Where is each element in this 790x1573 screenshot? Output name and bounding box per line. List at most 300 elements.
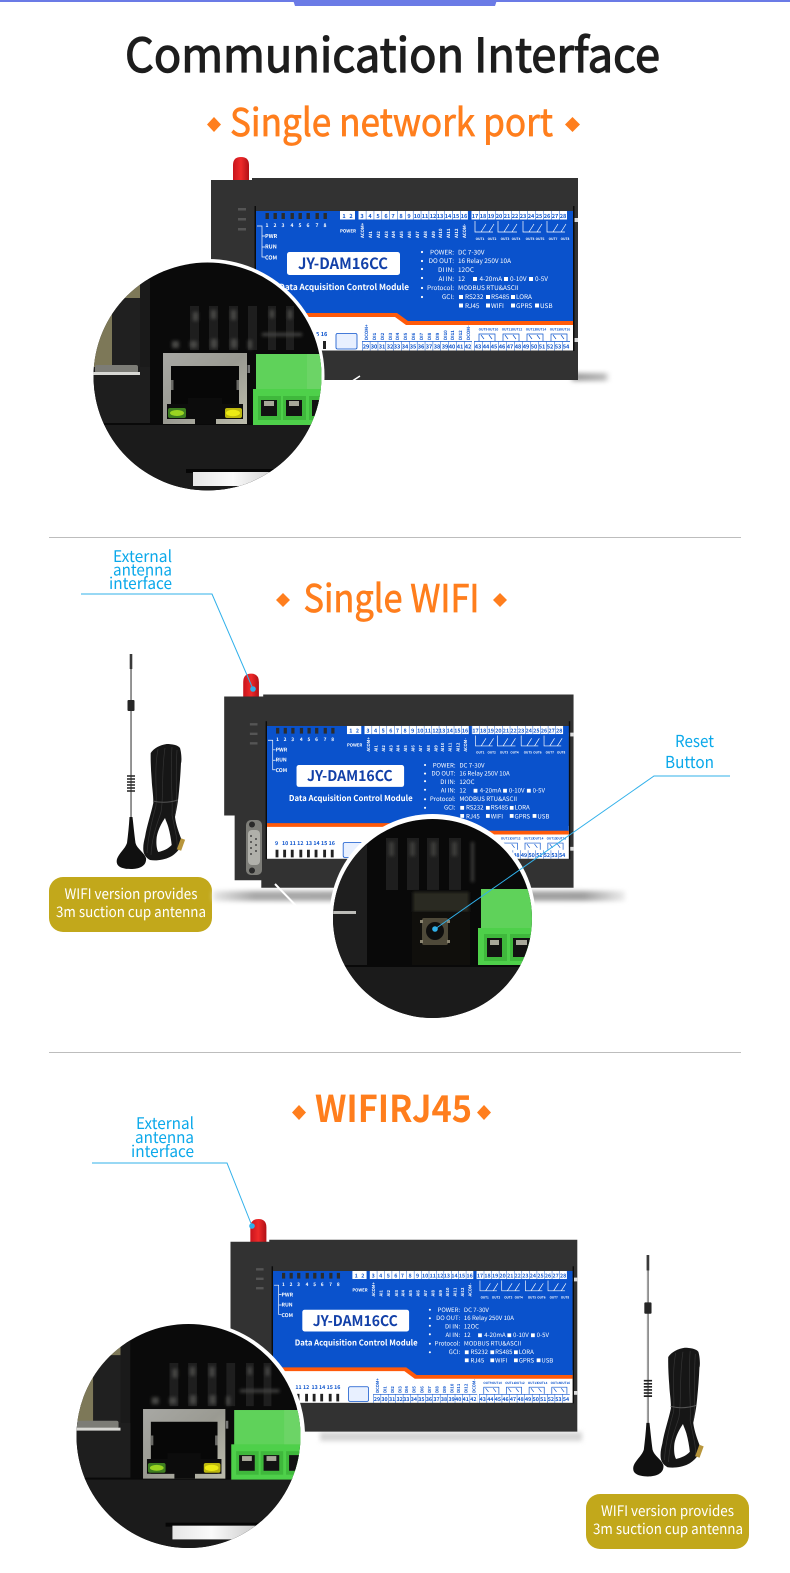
panel: blue device faceplate: 31 bbox=[389, 1395, 395, 1403]
panel: blue device faceplate: 14 bbox=[305, 330, 312, 338]
panel: blue device faceplate: ACOM+ bbox=[360, 222, 366, 239]
specification list: DI IN: bbox=[438, 265, 454, 274]
panel: blue device faceplate: Data Acquisition Control Module bbox=[289, 793, 413, 804]
panel: blue device faceplate: AI5 bbox=[403, 745, 409, 753]
panel: blue device faceplate: 7 bbox=[329, 1281, 332, 1288]
panel: blue device faceplate: POWER bbox=[352, 1288, 368, 1293]
panel: blue device faceplate: AI8 bbox=[426, 745, 432, 753]
panel: blue device faceplate: AI5 bbox=[399, 231, 405, 239]
panel: blue device faceplate: OUT14 bbox=[537, 1380, 547, 1385]
panel: blue device faceplate: DI12 bbox=[458, 330, 464, 340]
panel: blue device faceplate: 20 bbox=[500, 1272, 506, 1279]
icon: suction cup antenna bbox=[117, 654, 183, 869]
panel: blue device faceplate: OUT3 bbox=[501, 236, 509, 241]
panel: blue device faceplate: 39 bbox=[449, 1395, 455, 1403]
panel: blue device faceplate: POWER bbox=[347, 743, 362, 748]
panel: blue device faceplate: 6 bbox=[307, 222, 310, 229]
panel: blue device faceplate: OUT5 bbox=[524, 750, 532, 755]
specification list: WIFI bbox=[491, 301, 504, 310]
panel: blue device faceplate: 15 bbox=[454, 727, 461, 735]
specification list: USB bbox=[541, 1356, 553, 1365]
specification list: RS232 bbox=[465, 292, 484, 301]
panel: blue device faceplate: 35 bbox=[418, 1395, 425, 1403]
specification list: AI IN: bbox=[446, 1331, 460, 1339]
panel: blue device faceplate: 16 bbox=[321, 330, 328, 338]
panel: blue device faceplate: AI9 bbox=[438, 1290, 444, 1297]
specification list: DC 7-30V bbox=[458, 248, 485, 256]
leader line: external antenna interface (WIFI) bbox=[81, 594, 256, 692]
panel: blue device faceplate: 6 bbox=[384, 212, 388, 220]
specification list: USB bbox=[537, 812, 549, 820]
inset: RJ45 port close-up, WIFI+RJ45 model bbox=[76, 1324, 305, 1548]
model label: JY-DAM16CC bbox=[307, 765, 393, 786]
specification list: MODBUS RTU&ASCII bbox=[459, 795, 517, 803]
panel: blue device faceplate: 8 bbox=[324, 222, 327, 229]
panel: blue device faceplate: DI9 bbox=[435, 332, 441, 340]
panel: blue device faceplate: OUT7 bbox=[550, 1295, 558, 1299]
panel: blue device faceplate: 51 bbox=[539, 342, 545, 350]
panel: blue device faceplate: ACOM+ bbox=[366, 737, 372, 753]
panel: blue device faceplate: OUT11 bbox=[501, 836, 511, 841]
panel: blue device faceplate: DI11 bbox=[456, 1383, 462, 1393]
panel: blue device faceplate: AI7 bbox=[415, 231, 421, 239]
panel: blue device faceplate: 22 bbox=[512, 212, 519, 220]
panel: blue device faceplate: 44 bbox=[483, 342, 490, 350]
panel: blue device faceplate: OUT1 bbox=[476, 236, 484, 241]
panel: blue device faceplate: 2 bbox=[361, 1272, 365, 1279]
panel: blue device faceplate: OUT14 bbox=[533, 836, 543, 841]
inset: RJ45 network port close-up bbox=[94, 259, 360, 490]
panel: blue device faceplate: DI6 bbox=[411, 332, 417, 340]
specification list: MODBUS RTU&ASCII bbox=[464, 1339, 521, 1348]
panel: blue device faceplate: 19 bbox=[488, 727, 495, 735]
panel: blue device faceplate: 32 bbox=[387, 342, 394, 350]
panel: blue device faceplate: 4 bbox=[379, 1272, 383, 1279]
panel: blue device faceplate: 13 bbox=[297, 330, 303, 338]
panel: blue device faceplate: PWR bbox=[265, 232, 278, 240]
panel: blue device faceplate: 2 bbox=[349, 212, 353, 220]
panel: blue device faceplate: AI10 bbox=[440, 742, 446, 753]
specification list: Protocol: bbox=[435, 1339, 460, 1348]
panel: blue device faceplate: OUT9 bbox=[483, 1380, 492, 1385]
panel: blue device faceplate: ACOM- bbox=[462, 223, 468, 239]
panel: blue device faceplate: DI4 bbox=[395, 332, 401, 340]
panel: blue device faceplate: 10 bbox=[417, 727, 424, 735]
panel: blue device faceplate: 14 bbox=[451, 1272, 458, 1279]
specification list: DC 7-30V bbox=[459, 761, 485, 769]
panel: blue device faceplate: 3 bbox=[360, 212, 364, 220]
callout: external antenna interface (WIFI): External bbox=[113, 543, 172, 567]
specification list: RJ45 bbox=[465, 301, 480, 310]
callout: reset button: Reset bbox=[675, 728, 714, 752]
specification list: 0-5V bbox=[535, 274, 548, 283]
panel: blue device faceplate: AI10 bbox=[438, 228, 444, 239]
panel: blue device faceplate: OUT12 bbox=[512, 326, 522, 332]
panel: blue device faceplate: 13 bbox=[439, 727, 445, 735]
panel: blue device faceplate: 53 bbox=[555, 342, 561, 350]
panel: blue device faceplate: 47 bbox=[507, 342, 514, 350]
panel: blue device faceplate: 8 bbox=[337, 1281, 340, 1288]
panel: blue device faceplate: 3 bbox=[297, 1281, 300, 1288]
panel: blue device faceplate: OUT16 bbox=[560, 1380, 570, 1385]
panel: blue device faceplate: 33 bbox=[403, 1395, 409, 1403]
panel: blue device faceplate: OUT5 bbox=[526, 236, 534, 241]
specification list: USB bbox=[540, 301, 553, 310]
panel: blue device faceplate: OUT9 bbox=[479, 326, 487, 332]
panel: blue device faceplate: 19 bbox=[488, 212, 495, 220]
specification list: RJ45 bbox=[466, 812, 480, 820]
panel: blue device faceplate: AI3 bbox=[394, 1290, 400, 1297]
panel: blue device faceplate: 54 bbox=[559, 851, 566, 859]
badge: WIFI antenna note bbox=[49, 877, 212, 932]
panel: blue device faceplate: 24 bbox=[530, 1272, 537, 1279]
specification list: Protocol: bbox=[427, 283, 454, 292]
panel: blue device faceplate: DI1 bbox=[383, 1386, 388, 1393]
panel: blue device faceplate: 50 bbox=[531, 342, 538, 350]
panel: blue device faceplate: 17 bbox=[472, 727, 479, 735]
panel: blue device faceplate: 40 bbox=[455, 1395, 462, 1403]
panel: blue device faceplate: DI10 bbox=[443, 330, 449, 340]
panel: blue device faceplate: DI4 bbox=[404, 1386, 410, 1393]
panel: blue device faceplate: 43 bbox=[480, 1395, 486, 1403]
panel: blue device faceplate: AI12 bbox=[456, 742, 461, 753]
panel: blue device faceplate: DI7 bbox=[427, 1386, 433, 1393]
callout: external antenna interface (WIFI+RJ45): antenna bbox=[135, 1124, 194, 1148]
specification list: GCI: bbox=[444, 803, 456, 812]
panel: blue device faceplate: AI8 bbox=[423, 231, 429, 239]
panel: blue device faceplate: 1 bbox=[276, 736, 279, 743]
panel: blue device faceplate: 45 bbox=[491, 342, 497, 350]
panel: blue device faceplate: 26 bbox=[545, 1272, 552, 1279]
panel: blue device faceplate: 15 bbox=[313, 330, 319, 338]
top decorative bar bbox=[0, 0, 790, 6]
panel: blue device faceplate: 5 bbox=[299, 222, 302, 229]
panel: blue device faceplate: 49 bbox=[525, 1395, 532, 1403]
heading: single WIFI: Single WIFI bbox=[304, 568, 480, 623]
panel: blue device faceplate: POWER bbox=[340, 228, 356, 234]
panel: blue device faceplate: 7 bbox=[324, 736, 327, 743]
panel: blue device faceplate: 4 bbox=[306, 1281, 308, 1288]
panel: blue device faceplate: 12 bbox=[430, 212, 437, 220]
panel: blue device faceplate: 7 bbox=[391, 212, 395, 220]
panel: blue device faceplate: 7 bbox=[401, 1272, 405, 1279]
panel: blue device faceplate: 9 bbox=[407, 212, 411, 220]
specification list bbox=[421, 248, 553, 310]
panel: blue device faceplate: DI1 bbox=[372, 332, 378, 340]
panel: blue device faceplate: 1 bbox=[355, 1272, 358, 1279]
panel: blue device faceplate: 11 bbox=[430, 1272, 436, 1279]
panel: blue device faceplate: 5 bbox=[376, 212, 380, 220]
specification list: AI IN: bbox=[439, 274, 454, 283]
panel: blue device faceplate: COM bbox=[282, 1311, 293, 1319]
panel: blue device faceplate: 31 bbox=[379, 342, 385, 350]
panel: blue device faceplate: AI12 bbox=[460, 1287, 466, 1297]
panel: blue device faceplate: 17 bbox=[472, 212, 479, 220]
panel: blue device faceplate: 16 bbox=[334, 1383, 341, 1391]
panel: blue device faceplate: 12 bbox=[297, 839, 304, 847]
panel: blue device faceplate: RUN bbox=[265, 242, 277, 250]
panel: blue device faceplate: 44 bbox=[487, 1395, 494, 1403]
panel: blue device faceplate: OUT3 bbox=[504, 1295, 513, 1299]
panel: blue device faceplate: AI11 bbox=[453, 1287, 458, 1297]
heading: single network port: Single network port bbox=[230, 92, 553, 147]
panel: blue device faceplate: 7 bbox=[396, 727, 400, 735]
panel: blue device faceplate: AI6 bbox=[411, 745, 416, 753]
specification list: WIFI bbox=[495, 1356, 507, 1365]
panel: blue device faceplate: DCOM+ bbox=[364, 324, 370, 340]
panel: blue device faceplate: DI3 bbox=[398, 1386, 403, 1393]
panel: blue device faceplate: RUN bbox=[282, 1301, 293, 1308]
specification list: GPRS bbox=[519, 1356, 534, 1365]
panel: blue device faceplate: AI1 bbox=[374, 745, 379, 753]
panel: blue device faceplate: DI5 bbox=[412, 1386, 418, 1393]
panel: blue device faceplate: 24 bbox=[528, 212, 535, 220]
specification list: RS232 bbox=[471, 1348, 488, 1356]
panel: blue device faceplate: 6 bbox=[315, 736, 318, 743]
panel: blue device faceplate: 29 bbox=[374, 1395, 381, 1403]
specification list: DO OUT: bbox=[436, 1314, 460, 1322]
panel: blue device faceplate: AI2 bbox=[386, 1290, 392, 1297]
panel: blue device faceplate: DI8 bbox=[435, 1386, 440, 1393]
panel: blue device faceplate: 4 bbox=[300, 736, 303, 743]
specification list: 16 Relay 250V 10A bbox=[458, 256, 511, 265]
panel: blue device faceplate: 1 bbox=[266, 222, 269, 229]
panel: blue device faceplate: 54 bbox=[563, 342, 570, 350]
panel: blue device faceplate: COM bbox=[265, 254, 277, 262]
panel: blue device faceplate: 8 bbox=[408, 1272, 412, 1279]
panel: blue device faceplate: 21 bbox=[507, 1272, 513, 1279]
specification list: 0-10V bbox=[510, 274, 527, 283]
panel: blue device faceplate: 52 bbox=[548, 1395, 555, 1403]
panel: blue device faceplate: 9 bbox=[416, 1272, 420, 1279]
callout: external antenna interface (WIFI): interface bbox=[109, 570, 172, 594]
panel: blue device faceplate: OUT11 bbox=[502, 326, 512, 332]
panel: blue device faceplate: 25 bbox=[537, 1272, 544, 1279]
panel: blue device faceplate: 27 bbox=[552, 212, 559, 220]
panel: blue device faceplate: AI12 bbox=[454, 228, 460, 239]
panel: blue device faceplate: 13 bbox=[306, 839, 312, 847]
icon: red antenna connector bbox=[250, 1219, 266, 1243]
inset: reset button close-up bbox=[275, 810, 541, 1025]
panel: blue device faceplate: 11 bbox=[290, 839, 296, 847]
panel: blue device faceplate: 25 bbox=[536, 212, 542, 220]
panel: blue device faceplate: AI7 bbox=[423, 1290, 429, 1297]
specification list: RJ45 bbox=[471, 1356, 485, 1365]
specification list: GCI: bbox=[449, 1348, 460, 1356]
panel: blue device faceplate: DI8 bbox=[427, 332, 433, 340]
panel: blue device faceplate: 21 bbox=[503, 727, 509, 735]
panel: blue device faceplate: 42 bbox=[470, 1395, 477, 1403]
specification list: 12 bbox=[458, 274, 466, 283]
panel: blue device faceplate: DI6 bbox=[419, 1386, 425, 1393]
panel: blue device faceplate: OUT15 bbox=[551, 1380, 561, 1385]
panel: blue device faceplate: 28 bbox=[556, 727, 563, 735]
panel: blue device faceplate: 1 bbox=[342, 212, 346, 220]
panel: blue device faceplate: 45 bbox=[495, 1395, 501, 1403]
specification list: 0-5V bbox=[537, 1331, 549, 1339]
panel: blue device faceplate: 20 bbox=[495, 727, 502, 735]
panel: blue device faceplate: PWR bbox=[282, 1291, 293, 1298]
panel: blue device faceplate: 52 bbox=[544, 851, 551, 859]
panel: blue device faceplate: 53 bbox=[551, 851, 558, 859]
panel: blue device faceplate: 16 bbox=[461, 212, 468, 220]
panel: blue device faceplate: OUT12 bbox=[515, 1380, 525, 1385]
panel: blue device faceplate: AI10 bbox=[445, 1287, 451, 1297]
panel: blue device faceplate: AI5 bbox=[408, 1290, 414, 1297]
panel: blue device faceplate: RUN bbox=[276, 756, 287, 764]
panel: blue device faceplate: 46 bbox=[502, 1395, 509, 1403]
panel: blue device faceplate: DI11 bbox=[450, 330, 456, 340]
title: Communication Interface bbox=[125, 17, 660, 86]
specification list: 0-10V bbox=[509, 786, 525, 795]
panel: blue device faceplate: DI2 bbox=[380, 332, 386, 340]
panel: blue device faceplate: 51 bbox=[540, 1395, 546, 1403]
panel: blue device faceplate: 27 bbox=[549, 727, 555, 735]
panel: blue device faceplate: OUT8 bbox=[561, 1295, 569, 1299]
badge: WIFI antenna note: 3m suction cup antenna bbox=[56, 901, 206, 922]
panel: blue device faceplate: 23 bbox=[518, 727, 524, 735]
panel: blue device faceplate: 14 bbox=[447, 727, 454, 735]
panel: blue device faceplate: 50 bbox=[529, 851, 535, 859]
panel: blue device faceplate: AI9 bbox=[431, 231, 437, 239]
badge: WIFI antenna note, WIFI+RJ45 model: 3m suction cup antenna bbox=[593, 1518, 743, 1539]
specification list: 16 Relay 250V 10A bbox=[464, 1314, 514, 1322]
panel: blue device faceplate: 42 bbox=[465, 342, 472, 350]
panel: blue device faceplate: 34 bbox=[411, 1395, 418, 1403]
panel: blue device faceplate: 23 bbox=[520, 212, 526, 220]
panel: blue device faceplate: 40 bbox=[449, 342, 456, 350]
specification list: 4-20mA bbox=[480, 274, 502, 283]
panel: blue device faceplate: 10 bbox=[272, 330, 279, 338]
panel: blue device faceplate: 10 bbox=[282, 839, 289, 847]
panel: blue device faceplate: AI2 bbox=[381, 745, 387, 753]
leader line: external antenna interface (WIFI+RJ45) bbox=[92, 1163, 255, 1229]
panel: blue device faceplate: 15 bbox=[327, 1383, 333, 1391]
specification list: POWER: bbox=[433, 761, 456, 769]
panel: blue device faceplate: 18 bbox=[480, 727, 487, 735]
panel: blue device faceplate: 15 bbox=[459, 1272, 465, 1279]
panel: blue device faceplate: OUT1 bbox=[481, 1295, 489, 1299]
panel: blue device faceplate: OUT8 bbox=[557, 750, 565, 755]
specification list: GPRS bbox=[515, 812, 530, 820]
specification list: 12OC bbox=[459, 777, 474, 786]
panel: blue device faceplate: OUT12 bbox=[510, 836, 521, 841]
panel: blue device faceplate: OUT15 bbox=[550, 326, 560, 332]
icon: DB9 serial connector bbox=[246, 820, 262, 875]
callout: reset button bbox=[432, 728, 730, 932]
model label: JY-DAM16CC bbox=[298, 252, 388, 274]
panel: blue device faceplate: DCOM+ bbox=[375, 1378, 381, 1393]
panel: blue device faceplate: 4 bbox=[374, 727, 378, 735]
panel: blue device faceplate: OUT5 bbox=[528, 1295, 536, 1299]
panel: blue device faceplate: 16 bbox=[329, 839, 336, 847]
panel: blue device faceplate: OUT16 bbox=[556, 836, 566, 841]
panel: blue device faceplate: 34 bbox=[402, 342, 409, 350]
panel: blue device faceplate: 32 bbox=[397, 1395, 403, 1403]
panel: blue device faceplate: 52 bbox=[547, 342, 554, 350]
panel: blue device faceplate: OUT1 bbox=[476, 750, 485, 755]
specification list bbox=[424, 761, 549, 820]
panel: blue device faceplate: 4 bbox=[291, 222, 294, 229]
panel: blue device faceplate: 7 bbox=[316, 222, 319, 229]
panel: blue device faceplate bbox=[273, 1271, 573, 1403]
device: WIFI plus RJ45 model bbox=[230, 1219, 577, 1432]
panel: blue device faceplate: 28 bbox=[560, 212, 567, 220]
panel: blue device faceplate: 48 bbox=[513, 851, 520, 859]
panel: blue device faceplate: 9 bbox=[264, 330, 268, 338]
device: single WIFI model bbox=[224, 674, 574, 888]
panel: blue device faceplate: COM bbox=[276, 766, 287, 774]
specification list: 16 Relay 250V 10A bbox=[459, 769, 510, 777]
panel: blue device faceplate: 5 bbox=[307, 736, 310, 743]
panel: blue device faceplate: OUT14 bbox=[536, 326, 546, 332]
panel: blue device faceplate: 48 bbox=[515, 342, 522, 350]
specification list: DO OUT: bbox=[429, 256, 454, 265]
specification list: DO OUT: bbox=[431, 769, 456, 777]
panel: blue device faceplate: 11 bbox=[295, 1383, 302, 1391]
panel: blue device faceplate: 41 bbox=[457, 342, 463, 350]
panel: blue device faceplate: 2 bbox=[290, 1281, 292, 1288]
panel: blue device faceplate: AI4 bbox=[396, 745, 401, 753]
panel: blue device faceplate: 2 bbox=[356, 727, 360, 735]
panel: blue device faceplate: AI2 bbox=[376, 231, 382, 239]
panel: blue device faceplate: 18 bbox=[480, 212, 487, 220]
panel: blue device faceplate: OUT16 bbox=[560, 326, 570, 332]
specification list: 0-5V bbox=[533, 786, 545, 795]
panel: blue device faceplate: 50 bbox=[533, 1395, 540, 1403]
panel: blue device faceplate: 14 bbox=[319, 1383, 326, 1391]
panel: blue device faceplate: 30 bbox=[381, 1395, 388, 1403]
panel: blue device faceplate: DI7 bbox=[419, 332, 425, 340]
panel: blue device faceplate: 2 bbox=[284, 736, 287, 743]
panel: blue device faceplate: 22 bbox=[515, 1272, 522, 1279]
specification list: 4-20mA bbox=[480, 786, 501, 795]
panel: blue device faceplate: AI6 bbox=[416, 1290, 421, 1297]
panel: blue device faceplate: 54 bbox=[563, 1395, 570, 1403]
panel: blue device faceplate: ACOM+ bbox=[371, 1282, 377, 1297]
panel: blue device faceplate: 24 bbox=[526, 727, 533, 735]
panel: blue device faceplate: 1 bbox=[282, 1281, 285, 1288]
panel: blue device faceplate: 39 bbox=[442, 342, 449, 350]
panel: blue device faceplate: 51 bbox=[536, 851, 542, 859]
specification list: DI IN: bbox=[445, 1322, 460, 1331]
panel: blue device faceplate: OUT11 bbox=[505, 1380, 515, 1385]
panel: blue device faceplate: 37 bbox=[433, 1395, 440, 1403]
panel: blue device faceplate: AI6 bbox=[407, 231, 413, 239]
panel: blue device faceplate: 22 bbox=[510, 727, 517, 735]
panel: blue device faceplate: 8 bbox=[403, 727, 407, 735]
device: single network port model bbox=[211, 157, 578, 380]
panel: blue device faceplate: 46 bbox=[499, 342, 506, 350]
panel: blue device faceplate: OUT4 bbox=[510, 750, 519, 755]
panel: blue device faceplate: 30 bbox=[371, 342, 378, 350]
panel: blue device faceplate: OUT10 bbox=[488, 326, 498, 332]
panel: blue device faceplate: DI5 bbox=[403, 332, 409, 340]
panel: blue device faceplate: AI9 bbox=[434, 745, 439, 753]
panel: blue device faceplate: 11 bbox=[425, 727, 431, 735]
specification list: RS485 bbox=[495, 1348, 513, 1356]
panel: blue device faceplate: 49 bbox=[521, 851, 528, 859]
panel: blue device faceplate: AI11 bbox=[448, 742, 454, 753]
callout: external antenna interface (WIFI) bbox=[109, 543, 172, 594]
panel: blue device faceplate: 12 bbox=[303, 1383, 310, 1391]
model label: JY-DAM16CC bbox=[313, 1310, 398, 1331]
specification list: DI IN: bbox=[440, 777, 456, 786]
panel: blue device faceplate: OUT6 bbox=[536, 236, 544, 241]
panel: blue device faceplate: OUT6 bbox=[533, 750, 542, 755]
callout: external antenna interface (WIFI+RJ45) bbox=[131, 1110, 194, 1162]
panel: blue device faceplate: Data Acquisition Control Module bbox=[279, 281, 409, 293]
